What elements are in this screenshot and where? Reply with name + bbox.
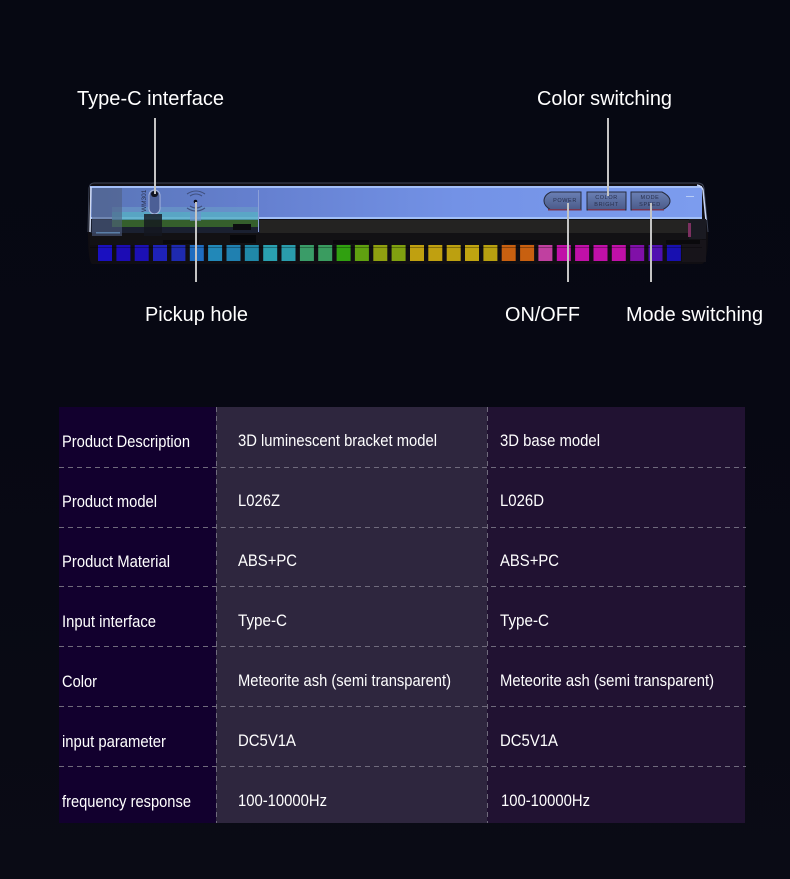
button: COLOR BRIGHT: BRIGHT — [594, 202, 619, 208]
transparent top panel — [90, 187, 702, 219]
row: Color: Meteorite ash (semi transparent) — [238, 671, 451, 690]
row: frequency response — [62, 791, 590, 811]
LED segments — [90, 245, 702, 261]
button: COLOR BRIGHT — [587, 192, 626, 210]
row: frequency response: 100-10000Hz — [501, 791, 590, 810]
row: input parameter: DC5V1A — [238, 731, 297, 750]
icon: pickup hole — [187, 191, 205, 221]
row: frequency response: frequency response — [62, 792, 191, 811]
button: MODE SPEED: SPEED — [639, 202, 661, 208]
row: Product model: Product model — [62, 492, 157, 511]
row: Product model: L026D — [500, 491, 544, 510]
row: Color: Color — [62, 672, 97, 691]
row: Product Material: Product Material — [62, 552, 170, 571]
callout: Mode switching — [626, 203, 763, 326]
row: Input interface: Type-C — [500, 611, 549, 630]
row: Color — [62, 671, 714, 691]
button: POWER: POWER — [553, 198, 577, 204]
bar body — [88, 183, 708, 264]
row: frequency response: 100-10000Hz — [238, 791, 327, 810]
row: input parameter — [62, 731, 559, 751]
row: input parameter: DC5V1A — [500, 731, 559, 750]
dark middle band — [260, 220, 702, 233]
row: Input interface: Type-C — [238, 611, 287, 630]
callout: Color switching — [537, 88, 672, 196]
row: input parameter: input parameter — [62, 732, 166, 751]
row: Product Description: 3D luminescent bracket model — [238, 431, 437, 450]
callout: Pickup hole: Pickup hole — [145, 304, 248, 326]
row: Product model: L026Z — [238, 491, 280, 510]
row: Product model — [62, 491, 544, 511]
row: Product Description: 3D base model — [500, 431, 600, 450]
clip details above LEDs — [163, 240, 700, 244]
button: POWER — [544, 192, 581, 210]
callout: Color switching: Color switching — [537, 88, 672, 110]
circuit board visible at left — [92, 188, 259, 243]
specification table — [59, 407, 746, 823]
callout: Mode switching: Mode switching — [626, 304, 763, 326]
button: MODE SPEED: MODE — [641, 195, 659, 201]
callout: Type-C interface: Type-C interface — [77, 88, 224, 110]
row: Product Material — [62, 551, 559, 571]
icon: Type-C port: WM301 — [141, 189, 148, 212]
callout: ON/OFF: ON/OFF — [505, 304, 580, 326]
row: Input interface: Input interface — [62, 612, 156, 631]
row: Product Material: ABS+PC — [500, 551, 559, 570]
right end cap — [682, 185, 706, 262]
icon: Type-C port — [141, 189, 162, 236]
row: Product Material: ABS+PC — [238, 551, 297, 570]
row: Product Description — [62, 431, 600, 451]
callout: ON/OFF — [505, 203, 580, 326]
table column backgrounds — [59, 407, 745, 823]
button: COLOR BRIGHT: COLOR — [595, 195, 618, 201]
callout: Pickup hole — [145, 202, 248, 326]
product: RGB light bar — [88, 183, 708, 264]
left end highlight — [90, 187, 91, 232]
button: MODE SPEED — [631, 192, 670, 210]
row: Color: Meteorite ash (semi transparent) — [500, 671, 714, 690]
row: Input interface — [62, 611, 549, 631]
row: Product Description: Product Description — [62, 432, 190, 451]
